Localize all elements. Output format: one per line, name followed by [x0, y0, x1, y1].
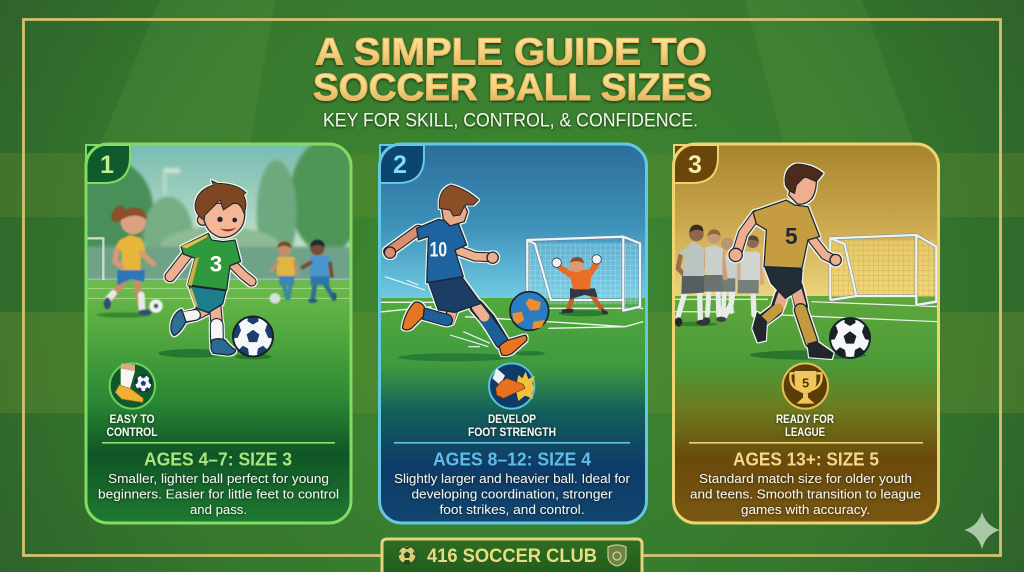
body text card 3: and teens. Smooth transition to league [690, 488, 921, 502]
label: ready for league [776, 412, 834, 439]
footer badge [382, 539, 642, 572]
label: ready for league: LEAGUE [785, 425, 825, 439]
icon: boot and ball [110, 363, 155, 409]
number tab 2 [380, 145, 424, 183]
subtitle: KEY FOR SKILL, CONTROL, & CONFIDENCE. [323, 110, 698, 132]
body text card 1 [98, 472, 339, 517]
body text card 2: developing coordination, stronger [412, 488, 612, 502]
icon: trophy: 5 [802, 376, 809, 390]
body text card 1: Smaller, lighter ball perfect for young [108, 472, 329, 486]
label: develop foot strength: FOOT STRENGTH [468, 425, 556, 439]
number tab 1 [86, 145, 130, 183]
body text card 1: beginners. Easier for little feet to control [98, 488, 339, 502]
title: SOCCER BALL SIZES [313, 67, 712, 109]
label: ready for league: READY FOR [776, 412, 834, 426]
icon: footer ball [398, 546, 416, 564]
number tab 3: 3 [688, 151, 702, 179]
heading: ages 4-7: AGES 4–7: SIZE 3 [144, 448, 292, 470]
panel: card 2 ages 8-12 [379, 144, 647, 523]
scene: goal and field lines [671, 235, 938, 360]
main player: number 10 kicking [384, 185, 527, 356]
body text card 2: Slightly larger and heavier ball. Ideal for [394, 472, 630, 486]
label: easy to control: CONTROL [106, 425, 158, 439]
main player: number 5: 5 [785, 223, 798, 249]
icon: boot strike [489, 363, 535, 409]
main player: number 5 [729, 164, 841, 358]
sparkle mark [964, 512, 1000, 549]
title [313, 32, 712, 109]
panel: card 3 ages 13+ [671, 144, 939, 523]
body text card 2 [394, 472, 630, 517]
body text card 3: Standard match size for older youth [699, 472, 912, 486]
background player: girl in yellow [97, 203, 163, 318]
size 3 ball [233, 316, 273, 356]
size 4 ball [510, 292, 549, 330]
scene: goal and keeper [380, 237, 643, 361]
background players: two kids [270, 240, 337, 304]
teammates group [675, 225, 762, 327]
title: A SIMPLE GUIDE TO [315, 32, 707, 74]
label: develop foot strength: DEVELOP [488, 412, 536, 426]
label: develop foot strength [468, 412, 556, 439]
size 5 ball [830, 318, 870, 358]
body text card 3 [690, 472, 921, 517]
icon: trophy [783, 363, 828, 409]
number tab 3 [674, 145, 718, 183]
heading: ages 13+: AGES 13+: SIZE 5 [733, 448, 879, 470]
body text card 2: foot strikes, and control. [440, 503, 584, 517]
label: easy to control: EASY TO [110, 412, 154, 426]
club name: 416 SOCCER CLUB [427, 545, 597, 567]
number tab 2: 2 [393, 151, 407, 179]
main player: number 10 kicking: 10 [430, 238, 447, 262]
icon: club shield [608, 545, 626, 566]
label: easy to control [106, 412, 158, 439]
scene: park background [88, 146, 350, 299]
heading: ages 8-12: AGES 8–12: SIZE 4 [433, 448, 592, 470]
main player: boy number 3: 3 [210, 252, 222, 277]
panel: card 1 ages 4-7 [67, 140, 363, 523]
body text card 3: games with accuracy. [741, 503, 870, 517]
main player: boy number 3 [158, 181, 272, 359]
body text card 1: and pass. [190, 503, 247, 517]
number tab 1: 1 [100, 151, 114, 179]
